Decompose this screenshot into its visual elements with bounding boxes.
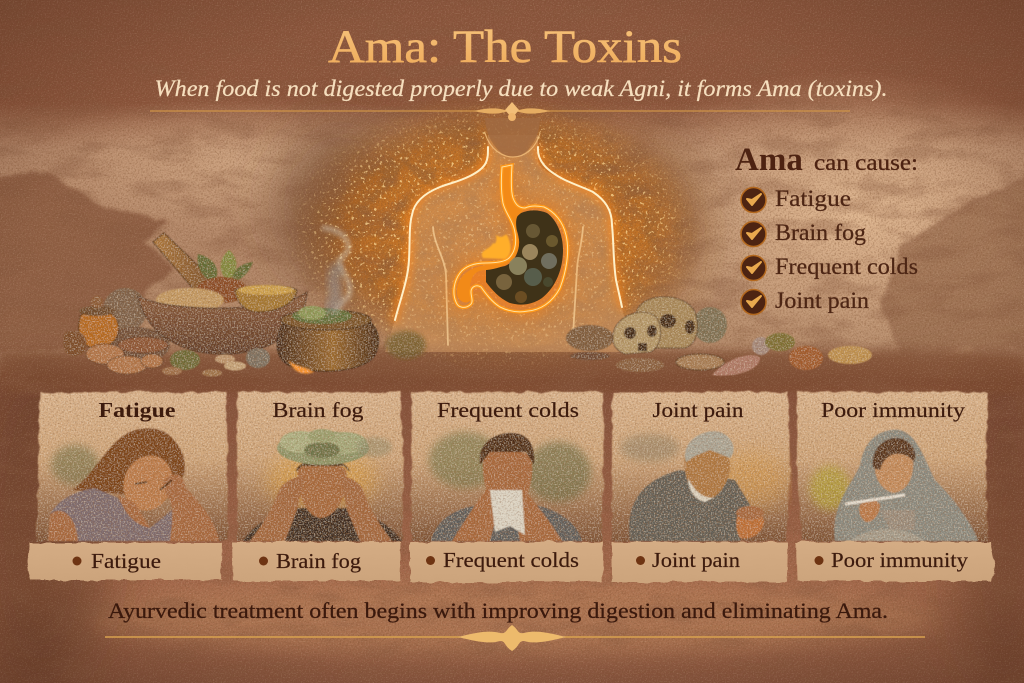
item: frequent colds: Frequent colds xyxy=(775,254,918,279)
item: fatigue: Fatigue xyxy=(775,186,851,211)
label: poor immunity: Poor immunity xyxy=(831,548,969,572)
jar xyxy=(63,296,119,356)
bottom divider with ornament xyxy=(105,625,925,651)
label: joint pain xyxy=(612,542,788,582)
sparks xyxy=(280,100,710,365)
heading: Poor immunity xyxy=(821,398,966,422)
label: frequent colds xyxy=(410,542,603,582)
panel: brain fog xyxy=(237,392,404,541)
label: fatigue xyxy=(28,543,222,580)
illustration: hooded woman with thermometer xyxy=(810,430,978,541)
body figure with glowing outline xyxy=(385,118,632,352)
top divider with ornament xyxy=(150,102,850,121)
illustration: tired woman xyxy=(48,428,219,541)
mortar bowl xyxy=(138,292,307,354)
backing rocks xyxy=(103,288,147,332)
heading: Frequent colds xyxy=(437,398,579,422)
icon: leaves xyxy=(198,250,253,282)
item: joint pain: Joint pain xyxy=(775,288,870,313)
label: brain fog xyxy=(232,542,401,581)
panel: Ama can cause checklist: can cause: xyxy=(814,150,918,175)
card paper xyxy=(612,392,790,541)
panel: joint pain xyxy=(612,392,790,541)
steam xyxy=(322,228,350,312)
offerings and stones xyxy=(570,333,872,376)
fire under the pot xyxy=(288,360,314,374)
spices in the bowl xyxy=(156,277,247,312)
ginger roots xyxy=(86,337,168,374)
illustration: older man holding his wrist xyxy=(620,431,788,541)
card paper xyxy=(411,392,604,541)
illustration: man with tissue xyxy=(429,432,591,541)
card paper xyxy=(237,392,404,541)
item: brain fog: Brain fog xyxy=(775,220,867,245)
labels strip xyxy=(28,542,995,582)
background mountains xyxy=(0,170,1024,350)
large skull xyxy=(636,297,697,348)
label: poor immunity xyxy=(796,542,995,581)
pestle xyxy=(153,233,210,292)
heading: Brain fog xyxy=(272,398,364,422)
cooking pot xyxy=(277,320,379,371)
heading: Fatigue xyxy=(98,398,176,422)
label: fatigue: Fatigue xyxy=(91,549,161,573)
ground band xyxy=(0,349,1024,392)
item: joint pain xyxy=(741,288,870,314)
card paper xyxy=(36,392,228,541)
footer sentence: Ayurvedic treatment often begins with improving digestion and eliminating Ama. xyxy=(108,598,888,623)
illustration: man with fog around his head xyxy=(243,429,402,541)
skulls and stones xyxy=(566,297,872,376)
item: brain fog xyxy=(741,220,867,246)
icon: glowing stomach xyxy=(454,165,568,312)
title: Ama: The Toxins xyxy=(328,21,682,73)
panel: fatigue xyxy=(36,392,228,541)
panel: frequent colds xyxy=(411,392,604,541)
item: fatigue xyxy=(741,186,851,212)
label: brain fog: Brain fog xyxy=(276,549,362,573)
small stones and seeds xyxy=(162,348,270,376)
still life: herbs, mortar and pot xyxy=(63,228,426,376)
dark toxin cloud behind the body xyxy=(275,93,712,363)
card paper xyxy=(797,392,988,541)
subtitle: When food is not digested properly due to weak Agni, it forms Ama (toxins). xyxy=(154,76,888,101)
panel: poor immunity xyxy=(797,392,988,541)
small bowl xyxy=(235,286,297,312)
small skull xyxy=(613,312,661,354)
heading: Ama xyxy=(735,142,803,178)
panel: Ama can cause checklist xyxy=(735,142,918,314)
label: joint pain: Joint pain xyxy=(652,548,741,572)
plant xyxy=(386,331,426,359)
heading: Joint pain xyxy=(652,398,744,422)
label: frequent colds: Frequent colds xyxy=(443,548,579,572)
